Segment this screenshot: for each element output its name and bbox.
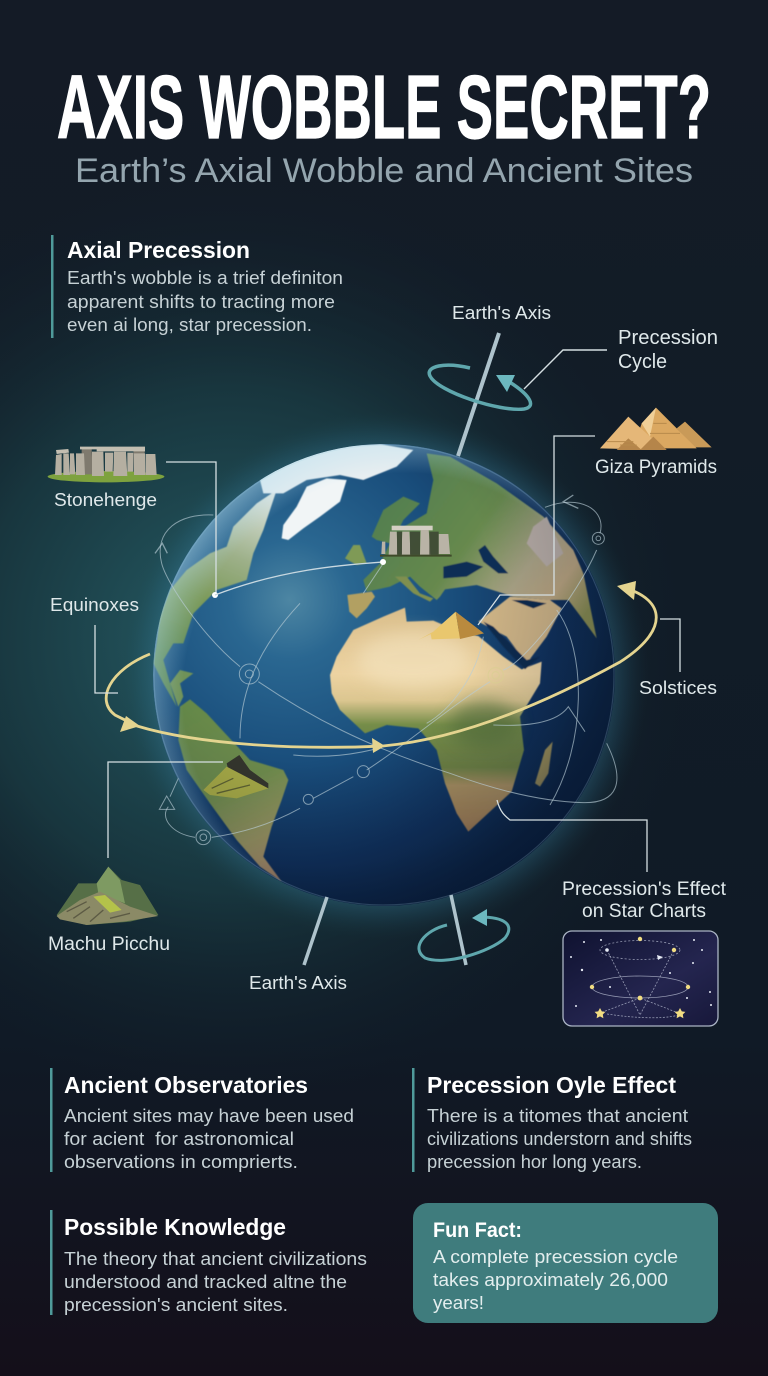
leader: machu picchu — [108, 762, 223, 858]
machu on globe — [203, 755, 268, 798]
panel: ancient observatories: Ancient Observatories — [64, 1072, 308, 1098]
panel: ancient observatories: Ancient sites may have been used — [64, 1105, 354, 1126]
label: equinoxes: Equinoxes — [50, 595, 139, 615]
panel: fun fact — [413, 1203, 718, 1323]
icon: machu picchu — [57, 867, 158, 925]
congo green — [450, 700, 517, 747]
panel: fun fact: takes approximately 26,000 — [433, 1269, 668, 1290]
label: precession cycle: Precession — [618, 327, 718, 349]
panel: precession cycle effect: precession hor long years. — [427, 1151, 642, 1172]
panel: precession cycle effect: There is a titomes that ancient — [427, 1105, 688, 1126]
label: stonehenge: Stonehenge — [54, 490, 157, 510]
bottom axis right with ring — [419, 895, 509, 965]
panel: ancient observatories — [50, 1068, 354, 1172]
leader: giza — [478, 436, 595, 625]
panel: fun fact: years! — [433, 1292, 484, 1313]
label: earth's axis bottom: Earth's Axis — [249, 973, 347, 993]
panel: possible knowledge: precession's ancient sites. — [64, 1294, 288, 1315]
himalaya — [527, 517, 563, 567]
panel: axial precession: Axial Precession — [67, 237, 250, 263]
top axis and precession ring — [429, 333, 531, 456]
arctic ice — [260, 444, 413, 493]
leader: star charts — [497, 800, 647, 872]
label: precession's effect: on Star Charts — [582, 901, 706, 922]
panel: possible knowledge: understood and tracked altne the — [64, 1271, 347, 1292]
africa — [330, 608, 542, 832]
stonehenge on globe — [380, 526, 452, 557]
central america — [170, 670, 193, 707]
panel: fun fact: A complete precession cycle — [433, 1246, 678, 1267]
globe — [153, 444, 615, 906]
label: precession's effect: Precession's Effect — [562, 879, 727, 900]
icon: stonehenge — [48, 447, 164, 482]
continents — [153, 444, 597, 882]
panel: precession cycle effect — [412, 1068, 692, 1172]
sahara highlight — [357, 632, 470, 688]
leader: equinoxes — [95, 625, 118, 693]
north america — [153, 490, 277, 707]
italy — [395, 577, 433, 602]
iberia — [347, 592, 375, 618]
leader: solstices — [660, 619, 680, 672]
pyramid on globe — [418, 612, 484, 640]
day-night shading — [183, 493, 615, 906]
subtitle: Earth’s Axial Wobble and Ancient Sites — [75, 152, 693, 190]
panel: star chart — [563, 931, 718, 1026]
panel: axial precession: Earth's wobble is a trief definiton — [67, 267, 343, 288]
panel: ancient observatories: observations in comprierts. — [64, 1151, 298, 1172]
icon: giza pyramids — [600, 408, 712, 450]
panel: axial precession: even ai long, star precession. — [67, 314, 312, 335]
label: earth's axis top: Earth's Axis — [452, 303, 551, 323]
label: precession cycle — [524, 327, 718, 389]
uk — [345, 545, 367, 565]
leader: stonehenge — [166, 462, 386, 598]
panel: precession cycle effect: civilizations understorn and shifts — [427, 1128, 692, 1149]
label: giza pyramids: Giza Pyramids — [595, 457, 717, 478]
eurasia — [363, 453, 597, 638]
panel: axial precession: apparent shifts to tracting more — [67, 291, 335, 312]
greenland — [282, 478, 347, 540]
south america — [178, 699, 288, 882]
label: solstices: Solstices — [639, 678, 717, 698]
label: machu picchu: Machu Picchu — [48, 934, 170, 955]
panel: possible knowledge — [50, 1210, 367, 1315]
panel: possible knowledge: Possible Knowledge — [64, 1214, 286, 1240]
panel: possible knowledge: The theory that ancient civilizations — [64, 1248, 367, 1269]
thin orbit lines — [155, 495, 617, 845]
label: precession's effect — [562, 879, 727, 922]
seas — [443, 545, 508, 578]
arabia — [478, 597, 562, 663]
bottom axis left — [304, 897, 327, 965]
yellow solstice orbit — [106, 581, 656, 753]
panel: ancient observatories: for acient for astronomical — [64, 1128, 294, 1149]
madagascar — [535, 742, 553, 787]
panel: axial precession — [51, 235, 343, 338]
atmosphere limb — [153, 444, 577, 873]
panel: precession cycle effect: Precession Oyle Effect — [427, 1072, 676, 1098]
label: precession cycle: Cycle — [618, 351, 667, 373]
panel: fun fact: Fun Fact: — [433, 1219, 522, 1242]
